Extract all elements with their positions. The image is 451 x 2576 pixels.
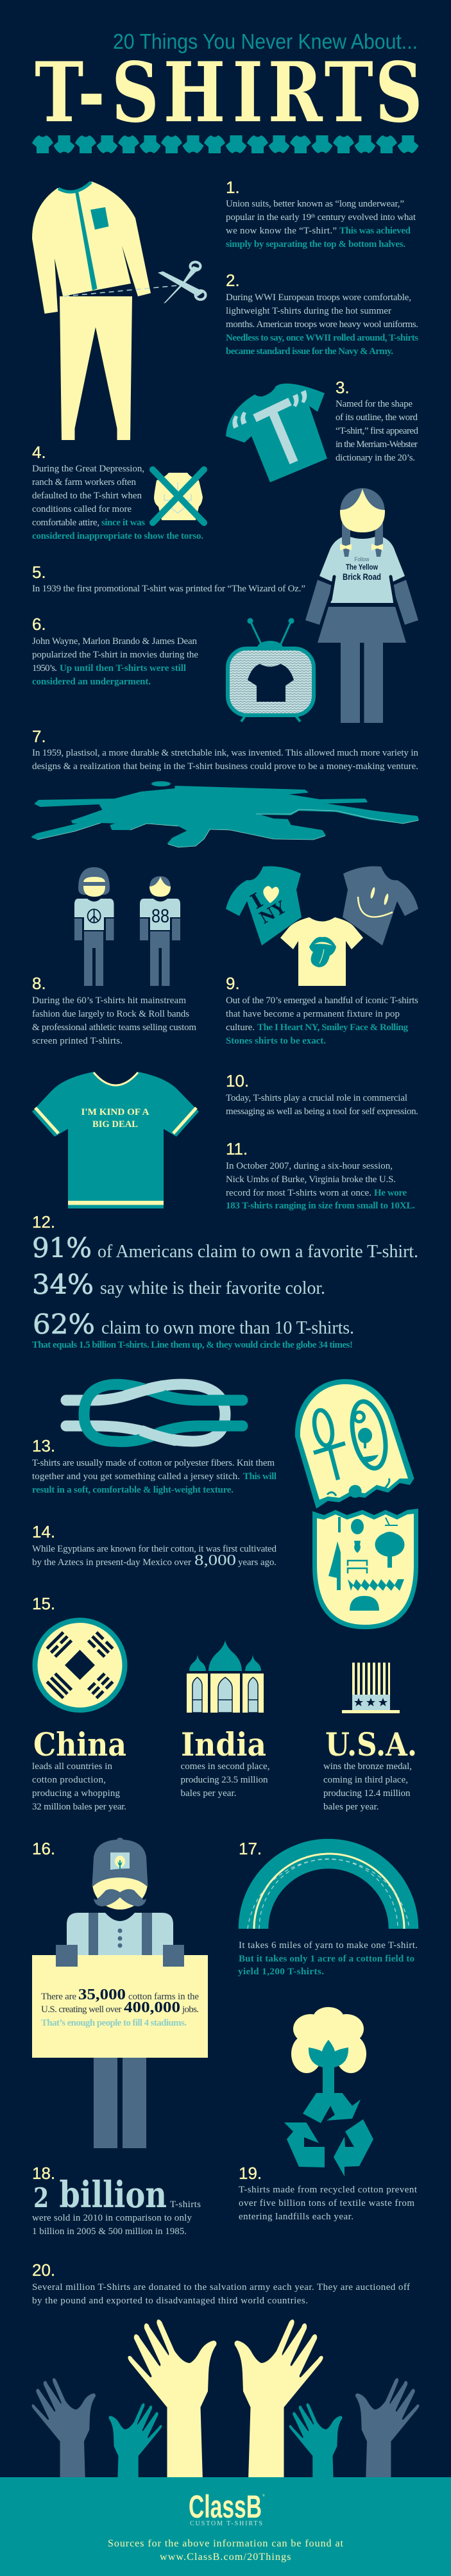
logo: ® (262, 2494, 265, 2498)
fact text: th (311, 213, 315, 219)
hands (56, 1945, 184, 1967)
legs (94, 2053, 146, 2148)
number: 4. (32, 443, 46, 462)
fact text: messaging as well as being a tool for self expression. (226, 1106, 418, 1117)
fact 10 (226, 1071, 418, 1117)
collar (58, 182, 91, 192)
fact text: But it takes only 1 acre of a cotton field to (239, 1954, 414, 1964)
fact text: During WWI European troops wore comfortable, (226, 292, 411, 303)
icon: China trigram coin (32, 1618, 127, 1713)
fact text (226, 1093, 418, 1117)
icon: Uncle Sam hat (342, 1663, 400, 1713)
hieroglyphs (328, 1517, 404, 1611)
fact 4 (32, 443, 203, 541)
recycling arrows (284, 2093, 373, 2176)
statistic 34%: say white is their favorite color. (100, 1278, 325, 1298)
fact 8 (32, 974, 196, 1046)
sign (32, 1955, 208, 2058)
number: 5. (32, 563, 46, 582)
number: 7. (32, 727, 46, 746)
title: T-SHIRTS (35, 45, 423, 141)
legs (341, 641, 383, 723)
icon: India palace (187, 1640, 264, 1713)
U.S.A. text: wins the bronze medal, (323, 1761, 412, 1772)
fact text: we now know the “T-shirt.” (226, 226, 337, 236)
statistic 34%: 34% (32, 1269, 94, 1300)
illustration: yarn arch (248, 1854, 409, 1929)
statistic note: That equals 1.5 billion T-shirts. Line them up, & they would circle the globe 34 times! (32, 1340, 353, 1350)
shirt slogan: Follow (354, 556, 370, 563)
fact text (32, 2199, 201, 2237)
statistic 62%: 62% (33, 1309, 95, 1340)
fact text: “T-shirt,” first appeared (336, 426, 418, 436)
India text: India (181, 1725, 266, 1763)
shirt (319, 536, 405, 603)
fact text: 8,000 (194, 1552, 236, 1569)
fact text: Stones shirts to be exact. (226, 1036, 326, 1046)
fact text (336, 399, 418, 463)
fact text: since it was (101, 518, 145, 528)
subtitle: 20 Things You Never Knew About... (113, 30, 418, 53)
jersey number: 88 (151, 906, 169, 927)
fact 5 (32, 563, 305, 594)
tablet top piece (295, 1379, 414, 1509)
slogan: BIG DEAL (92, 1119, 138, 1130)
fact text: that have become a permanent fixture in pop (226, 1009, 400, 1019)
China text (32, 1725, 126, 1812)
U.S.A. text: producing 12.4 million (323, 1788, 411, 1799)
fact text: This will (243, 1471, 277, 1482)
hair (340, 488, 385, 532)
fact text: 1 billion in 2005 & 500 million in 1985. (32, 2226, 187, 2237)
fact text: The I Heart NY, Smiley Face & Rolling (257, 1022, 408, 1033)
opening quote: “ (223, 403, 264, 455)
fact text: During the Great Depression, (32, 464, 144, 474)
number: 16. (32, 1839, 55, 1858)
statistic 91% (32, 1232, 418, 1264)
number: 19. (239, 2164, 262, 2183)
shirt (74, 899, 114, 930)
fact 11 (226, 1139, 415, 1211)
fact text: culture. (226, 1022, 255, 1033)
fact 18 (32, 2164, 201, 2237)
fact text: result in a soft, comfortable & light-weight texture. (32, 1485, 234, 1495)
fact 14 (32, 1522, 277, 1569)
U.S.A. text: coming in third place, (323, 1775, 408, 1785)
slogan (81, 1107, 149, 1130)
cotton boll (291, 2007, 366, 2073)
shirt slogan (343, 556, 381, 582)
fact 12 (32, 1212, 418, 1350)
icon: scissors (158, 262, 205, 303)
logo: ClassB (189, 2489, 262, 2525)
face (340, 489, 385, 532)
braids (342, 523, 383, 557)
fact text: simply by separating the top & bottom halves. (226, 239, 405, 250)
fact 1 (226, 178, 416, 250)
fact text: Nick Umbs of Burke, Virginia broke the U.S. (226, 1174, 396, 1185)
footer (0, 2477, 451, 2576)
illustration: athlete figure (140, 876, 180, 986)
India text: bales per year. (181, 1788, 236, 1799)
China text: producing a whopping (32, 1788, 121, 1799)
fact text: During the 60’s T-shirts hit mainstream (32, 996, 186, 1006)
fact 6 (32, 614, 198, 687)
fact 17 (238, 1839, 418, 1977)
feet (241, 716, 300, 722)
neck band (94, 1071, 138, 1085)
fact text (32, 464, 203, 541)
fact 19 (239, 2164, 418, 2222)
buttons (118, 1928, 122, 1947)
statistic 62% (33, 1309, 354, 1340)
illustration: hippie figure (74, 867, 114, 986)
fact text: considered inappropriate to show the torso. (32, 531, 203, 541)
illustration: plastisol ink splat (32, 781, 418, 847)
sign text: jobs. (182, 2004, 199, 2015)
fact text: screen printed T-shirts. (32, 1036, 123, 1046)
fact text (32, 748, 418, 772)
sleeve gaps (330, 577, 395, 600)
arms (305, 580, 418, 625)
fact text: over five billion tons of textile waste from (239, 2198, 414, 2208)
fact 13 (32, 1436, 277, 1495)
number: 12. (32, 1212, 55, 1232)
fact text: 1950’s. (32, 663, 57, 674)
fact text: by the pound and exported to disadvantaged third world countries. (32, 2296, 308, 2306)
fact text: months. American troops wore heavy wool uniforms. (226, 319, 418, 330)
fact text: comfortable attire, (32, 518, 99, 528)
fact text: T-shirts (170, 2199, 201, 2210)
statistic 91%: of Americans claim to own a favorite T-shirt. (98, 1242, 418, 1262)
number: 15. (32, 1594, 55, 1613)
cartouche (347, 1398, 391, 1471)
India text: producing 23.5 million (181, 1775, 268, 1785)
number: 18. (32, 2164, 55, 2183)
sign text: U.S. creating well over (41, 2004, 122, 2015)
row of alternating t-shirt icons (32, 135, 418, 153)
statistic 62%: claim to own more than 10 T-shirts. (101, 1318, 354, 1338)
cap (92, 1838, 148, 1887)
fact text: entering landfills each year. (239, 2212, 353, 2222)
smiley shirt (343, 866, 418, 945)
sign text: 35,000 (78, 1987, 126, 2003)
number: 20. (32, 2260, 55, 2280)
sign text (41, 1987, 199, 2028)
illustration: recycled cotton plant (284, 2007, 373, 2176)
sign text: cotton farms in the (128, 1992, 199, 2002)
China text: cotton production, (32, 1775, 106, 1785)
fact text: popular in the early 19 (226, 212, 311, 223)
hair (149, 876, 171, 888)
fact text: Out of the 70’s emerged a handful of iconic T-shirts (226, 996, 418, 1006)
fact text (32, 2282, 410, 2306)
fact 15 (32, 1594, 417, 1812)
fact text: yield 1,200 T-shirts. (238, 1967, 324, 1977)
fact text: defaulted to the T-shirt when (32, 491, 142, 501)
number: 10. (226, 1071, 249, 1090)
fact text (32, 996, 196, 1046)
zip strip (75, 191, 98, 291)
sign text: 400,000 (124, 1999, 180, 2016)
logo (189, 2489, 265, 2527)
arms (140, 919, 180, 940)
screen (228, 648, 314, 715)
fact text: fashion due largely to Rock & Roll bands (32, 1009, 189, 1019)
fact text: Several million T-Shirts are donated to the salvation army each year. They are auctioned off (32, 2282, 410, 2292)
union suit bottoms (60, 296, 132, 440)
illustration: iconic T-shirts (226, 866, 418, 986)
China text: China (33, 1725, 126, 1763)
hair (78, 867, 110, 895)
fact text: of its outline, the word (336, 412, 418, 423)
fact text: In 1939 the first promotional T-shirt was printed for “The Wizard of Oz.” (32, 584, 305, 594)
trousers (150, 931, 169, 986)
fact text: years ago. (238, 1557, 277, 1568)
fact text: Union suits, better known as “long underwear,” (226, 199, 404, 209)
fact 2 (226, 271, 418, 357)
number: 9. (226, 974, 240, 993)
fact text: conditions called for more (32, 504, 132, 514)
fact text: considered an undergarment. (32, 677, 151, 687)
fact text (32, 1544, 277, 1569)
number: 14. (32, 1522, 55, 1541)
fact text (239, 2185, 418, 2222)
number: 11. (226, 1139, 248, 1158)
number: 1. (226, 178, 240, 197)
fact text: became standard issue for the Navy & Army. (226, 346, 393, 357)
shirt (140, 899, 180, 930)
cut line (64, 285, 178, 296)
fact text: While Egyptians are known for their cotton, it was first cultivated (32, 1544, 277, 1554)
two billion figure: 2 billion (33, 2174, 167, 2216)
trousers (84, 931, 103, 986)
cap badge (110, 1852, 130, 1870)
fact text: This was achieved (339, 226, 411, 236)
sleeve bands (35, 1108, 196, 1133)
face (83, 877, 105, 897)
fact text: together and you get something called a jersey stitch. (32, 1471, 240, 1482)
statistic 34% (32, 1269, 325, 1300)
China text: 32 million bales per year. (32, 1802, 126, 1812)
headband (83, 882, 105, 886)
antennae (250, 621, 291, 645)
illustration: girl with Yellow Brick Road shirt (305, 488, 418, 723)
fact text: Today, T-shirts play a crucial role in commercial (226, 1093, 407, 1103)
icon: crossed-out bare torso (153, 470, 204, 523)
shirt slogan: The Yellow (346, 563, 379, 572)
fact text: In October 2007, during a six-hour session, (226, 1161, 393, 1171)
illustration: torn Egyptian tablet (295, 1379, 418, 1629)
fact 16 (32, 1838, 208, 2148)
India text: comes in second place, (181, 1761, 269, 1772)
slogan: I'M KIND OF A (81, 1107, 149, 1117)
fact text (226, 199, 416, 250)
illustration: knot of fibers (66, 1384, 243, 1441)
fact text: lightweight T-shirts during the hot summer (226, 306, 391, 316)
face (92, 1856, 148, 1910)
fact text (32, 1458, 277, 1495)
sign text: That’s enough people to fill 4 stadiums. (41, 2018, 187, 2028)
ankh (311, 1409, 345, 1480)
illustration: slogan T-shirt (32, 1071, 199, 1208)
fact 7 (32, 727, 418, 772)
sources note: Sources for the above information can be found at (108, 2538, 344, 2549)
fact text: It takes 6 miles of yarn to make one T-shirt. (239, 1940, 418, 1951)
fact text: by the Aztecs in present-day Mexico over (32, 1557, 191, 1568)
Rolling Stones shirt (280, 917, 363, 986)
face (149, 877, 171, 897)
fact text: Needless to say, once WWII rolled around, T-shirts (226, 333, 418, 343)
fact text: ranch & farm workers often (32, 477, 136, 487)
skirt (318, 607, 406, 643)
tablet bottom piece (312, 1509, 418, 1629)
fact text: 183 T-shirts ranging in size from small to 10XL. (226, 1201, 415, 1211)
illustration: raised hands (32, 2319, 419, 2512)
fact text: Up until then T-shirts were still (60, 663, 186, 674)
fact text: dictionary in the 20’s. (336, 453, 415, 463)
illustration: union suit (32, 182, 178, 440)
peace sign (88, 910, 101, 922)
suspenders (89, 1913, 152, 1956)
fact text: In 1959, plastisol, a more durable & stretchable ink, was invented. This allowed much more variety in (32, 748, 418, 758)
pocket (90, 207, 109, 230)
sepals (309, 2040, 348, 2067)
hem band (68, 1201, 164, 1205)
shirt slogan: Brick Road (343, 572, 381, 582)
fact text: Named for the shape (336, 399, 413, 409)
mustache (94, 1889, 146, 1906)
illustration: cotton farmer (32, 1838, 208, 2148)
fact text: T-shirts are usually made of cotton or polyester fibers. Knit them (32, 1458, 275, 1468)
fact text: He wore (374, 1188, 407, 1198)
logo: CUSTOM T-SHIRTS (190, 2520, 262, 2527)
arms (74, 919, 114, 940)
shirt (67, 1913, 173, 1956)
fact text (238, 1940, 418, 1977)
statistic 91%: 91% (32, 1232, 92, 1264)
fact 9 (226, 974, 418, 1046)
shirt on screen (248, 664, 294, 702)
fact text: & professional athletic teams selling custom (32, 1022, 196, 1033)
fact 20 (32, 2260, 410, 2306)
union suit top (32, 182, 151, 314)
I heart NY shirt: NY (257, 898, 290, 928)
U.S.A. text (323, 1725, 417, 1812)
stem (323, 2065, 334, 2094)
India text (181, 1725, 269, 1799)
number: 17. (239, 1839, 262, 1858)
number: 8. (32, 974, 46, 993)
fact text: were sold in 2010 in comparison to only (32, 2213, 192, 2223)
sign text: There are (41, 1992, 76, 2002)
fact text: century evolved into what (315, 212, 416, 223)
sources note: www.ClassB.com/20Things (160, 2552, 291, 2563)
fact text (226, 996, 418, 1046)
number: 3. (336, 378, 350, 397)
fact text: designs & a realization that being in the T-shirt business could prove to be a money-making venture. (32, 761, 418, 772)
fact text: T-shirts made from recycled cotton prevent (239, 2185, 418, 2195)
icon: television (228, 618, 314, 722)
fact text: John Wayne, Marlon Brando & James Dean (32, 636, 198, 647)
sources note (108, 2538, 344, 2563)
fact text: popularized the T-shirt in movies during the (32, 650, 198, 660)
fact text (226, 292, 418, 357)
fact text (226, 1161, 415, 1211)
number: 2. (226, 271, 240, 290)
torn glyphs (327, 1479, 389, 1498)
fact text: record for most T-shirts worn at once. (226, 1188, 371, 1198)
number: 6. (32, 614, 46, 634)
closing quote: ” (284, 381, 325, 434)
U.S.A. text: U.S.A. (325, 1725, 417, 1763)
fact 3 (336, 378, 418, 463)
U.S.A. text: bales per year. (323, 1802, 379, 1812)
hair bows (340, 544, 383, 550)
China text: leads all countries in (32, 1761, 113, 1772)
number: 13. (32, 1436, 55, 1455)
illustration: tilted T-shirt (223, 381, 327, 482)
I heart NY shirt (226, 866, 302, 945)
fact text (32, 636, 198, 687)
I heart NY shirt: I (246, 888, 267, 914)
fact text: in the Merriam-Webster (336, 439, 418, 450)
